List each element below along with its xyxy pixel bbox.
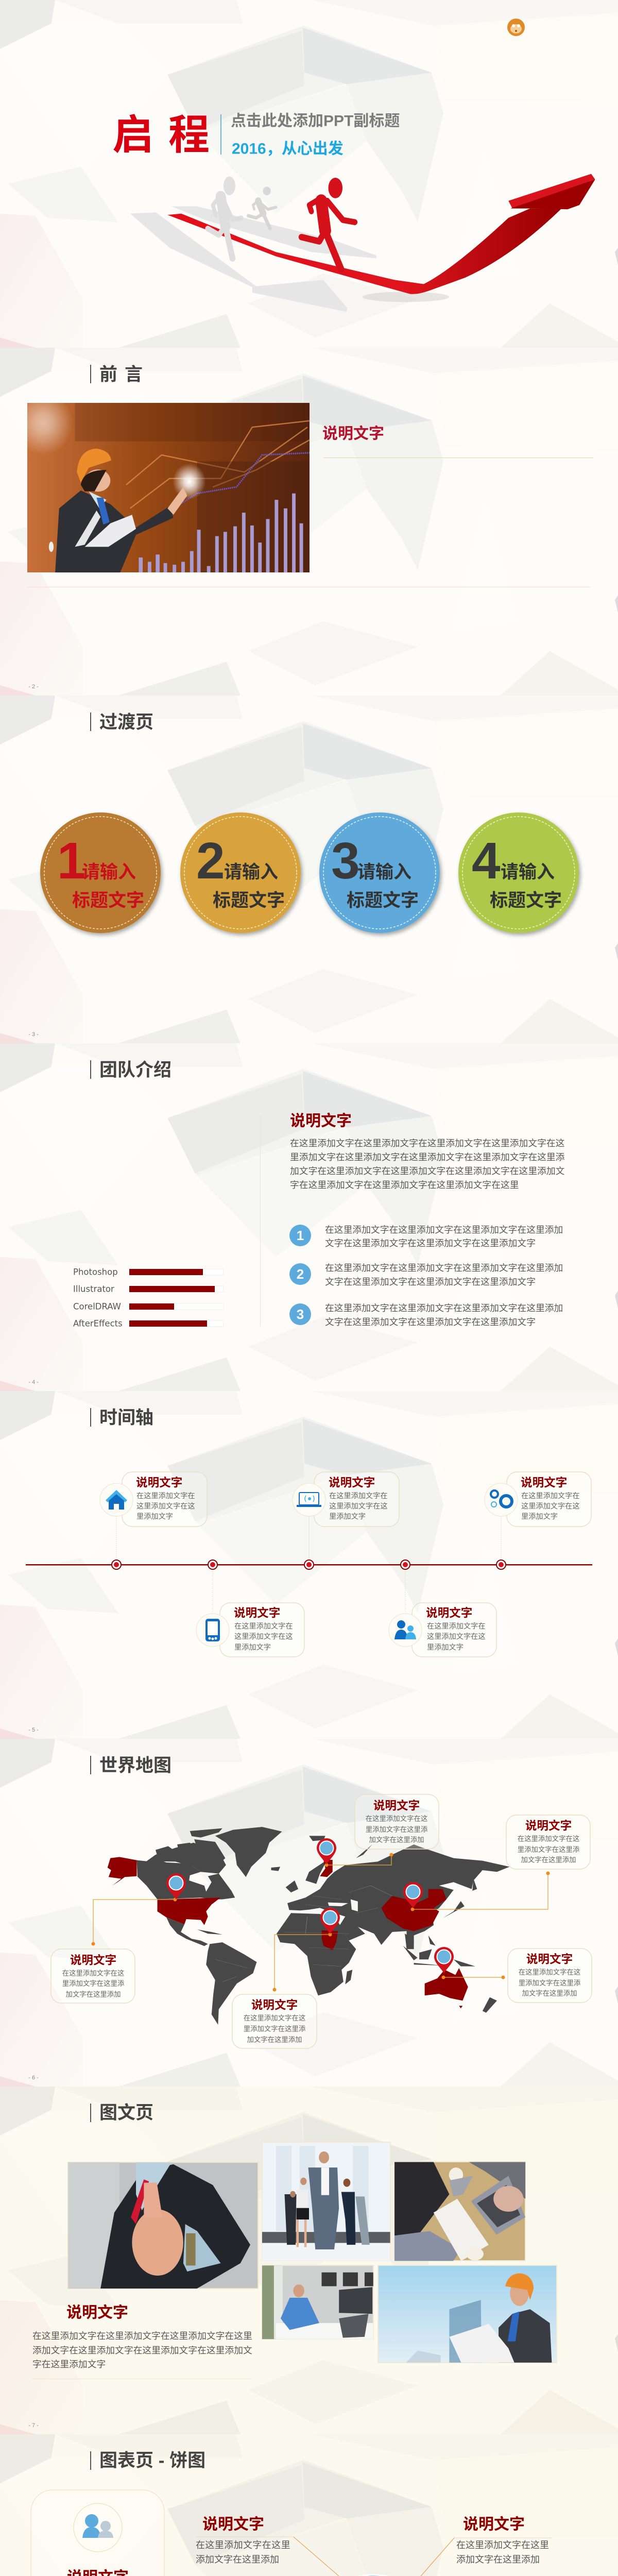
pie label: top left: 说明文字 [202,2516,264,2533]
photo: engineer with blueprint [378,2265,557,2363]
timeline card 2: 这里添加文字在这 [234,1632,293,1641]
illustration: runners on red arrow [130,174,595,312]
map card: south: 说明文字 [251,1999,298,2011]
map card: north [355,1794,439,1849]
skill bars: Illustrator [73,1284,114,1294]
timeline axis [26,1516,592,1614]
vertical divider [260,1115,261,1327]
list item 1: 文字在这里添加文字在这里添加文字在这里添加文字 [325,1238,536,1248]
map card: east: 说明文字 [525,1820,572,1832]
list item 2: 在这里添加文字在这里添加文字在这里添加文字在这里添加 [325,1263,563,1273]
photo: meeting desk [394,2162,525,2261]
map pins [166,1838,454,1973]
timeline card 5: 里添加文字 [521,1513,558,1521]
pie label: top right: 添加文字在这里添加 [456,2554,540,2565]
heading: 图文页: 图文页 [99,2103,153,2123]
icon: phone [196,1614,229,1647]
page number 6: - 6 - [28,2075,39,2081]
skill bars [73,1267,224,1328]
timeline card 5: 这里添加文字在这 [521,1502,580,1511]
map card: north: 加文字在这里添加 [369,1835,424,1843]
map card: southeast: 说明文字 [526,1953,573,1966]
icon: logo badge [507,19,525,36]
map card: southeast: 加文字在这里添加 [522,1989,577,1997]
list item 1 [289,1225,563,1248]
text block: team description: 加文字在这里添加文字在这里添加文字在这里添加文字在这里添加文 [290,1166,565,1176]
heading: 时间轴: 时间轴 [99,1408,153,1428]
text block: team description: 里添加文字在这里添加文字在这里添加文字在这里添加文字在这里添 [290,1152,565,1162]
timeline card 2: 说明文字 [234,1606,280,1620]
timeline card 3: 在这里添加文字在 [329,1492,388,1500]
map card: north: 说明文字 [373,1799,420,1812]
text block: team description: 字在这里添加文字在这里添加文字在这里添加文字在这里 [290,1180,519,1190]
timeline card 1: 这里添加文字在这 [136,1502,195,1511]
heading: 前言: 前言 [99,365,150,384]
felt badge 1 [40,812,161,933]
panel: pie side card [31,2490,164,2576]
photo: engineer with chart [14,391,310,572]
felt badge 2: 2 [196,832,225,890]
icon: people [389,1614,422,1647]
felt badge 1: 标题文字 [72,890,144,911]
photo: thumbs up [68,2162,258,2289]
timeline card 3: 里添加文字 [329,1513,366,1521]
title: 启程 [112,112,225,158]
felt badge 4: 标题文字 [490,890,562,911]
caption block: photo page: 说明文字 [66,2304,128,2321]
page number 3: - 3 - [28,1031,39,1038]
map card: east: 加文字在这里添加 [521,1856,576,1864]
pie label: top right: 说明文字 [463,2516,525,2533]
map card: north: 里添加文字在这里添 [366,1825,427,1833]
pie chart [305,2575,443,2576]
felt badge 4: 4 [472,832,501,890]
skill bars: CorelDRAW [73,1301,121,1312]
map card: southeast [508,1948,592,2003]
page number 7: - 7 - [28,2422,39,2429]
map card: south [232,1994,317,2048]
list item 3 [289,1303,563,1327]
list item 2: 文字在这里添加文字在这里添加文字在这里添加文字 [325,1277,536,1287]
timeline card 1 [122,1472,207,1527]
felt badge 2 [180,812,301,933]
list item 1: 在这里添加文字在这里添加文字在这里添加文字在这里添加 [325,1225,563,1235]
photo: business team [262,2142,390,2261]
skill bars: AfterEffects [73,1319,123,1328]
pie label: top right [399,2516,552,2576]
felt badge 3: 3 [331,832,360,890]
pie label: top left: 在这里添加文字在这里 [196,2540,290,2550]
list item 1: 1 [297,1228,304,1243]
map card: southeast: 里添加文字在这里添 [519,1978,580,1987]
timeline card 3 [314,1472,399,1527]
map card: south: 里添加文字在这里添 [244,2025,305,2033]
caption block: photo page: 字在这里添加文字 [32,2359,106,2369]
timeline card 5: 在这里添加文字在 [521,1492,580,1500]
timeline card 3: 这里添加文字在这 [329,1502,388,1511]
felt badge 2: 请输入 [224,862,278,882]
felt badge 4: 请输入 [501,862,555,882]
timeline card 4 [412,1603,496,1657]
map card: southeast: 在这里添加文字在这 [519,1968,580,1976]
heading: 饼图: 图表页 - 饼图 [99,2450,205,2471]
map card: south: 加文字在这里添加 [247,2035,302,2043]
timeline card 4: 在这里添加文字在 [427,1622,486,1631]
icon: gears [485,1483,518,1516]
list item 3: 3 [297,1307,304,1322]
map card: east [506,1815,590,1869]
timeline card 2: 里添加文字 [234,1643,271,1652]
map card: west: 在这里添加文字在这 [62,1969,124,1977]
timeline card 4: 说明文字 [426,1606,472,1620]
felt badge 4 [458,812,579,933]
text block: team description [290,1113,565,1190]
caption: 说明文字: 说明文字 [322,426,384,442]
timeline card 1: 在这里添加文字在 [136,1492,195,1500]
timeline card 2: 在这里添加文字在 [234,1622,293,1631]
pie label: top right: 在这里添加文字在这里 [456,2540,549,2550]
map card: east: 在这里添加文字在这 [518,1834,579,1842]
text block: team description: 在这里添加文字在这里添加文字在这里添加文字在这里添加文字在这 [290,1138,565,1148]
map card: south: 在这里添加文字在这 [244,2013,305,2022]
felt badge 3: 标题文字 [347,890,419,911]
map connectors [92,1853,550,1992]
text block: team description: 说明文字 [290,1113,352,1129]
felt badge 1: 请输入 [82,862,136,882]
page number 5: - 5 - [28,1727,39,1733]
timeline card 5: 说明文字 [521,1477,567,1489]
tagline: 2016，从心出发 [232,140,344,158]
title divider [220,114,221,155]
map card: east: 里添加文字在这里添 [518,1845,579,1854]
heading: 团队介绍: 团队介绍 [99,1060,171,1080]
caption block: photo page: 添加文字在这里添加文字在这里添加文字在这里添加文 [32,2345,252,2355]
map card: west: 加文字在这里添加 [65,1990,121,1998]
felt badge 1: 1 [57,832,86,890]
pie label: top left: 添加文字在这里添加 [196,2554,279,2565]
timeline card 3: 说明文字 [329,1477,375,1489]
caption block: photo page [32,2304,252,2379]
list item 3: 文字在这里添加文字在这里添加文字在这里添加文字 [325,1317,536,1327]
felt badge 3: 请输入 [357,862,411,882]
subtitle: 点击此处添加PPT副标题 [231,112,400,130]
map card: west [51,1949,135,2003]
timeline card 4: 里添加文字 [427,1643,464,1652]
pie label: top left [196,2516,360,2576]
page number 2: - 2 - [28,684,39,690]
timeline card 5 [507,1472,591,1527]
timeline card 1: 里添加文字 [136,1513,173,1521]
heading: 世界地图: 世界地图 [99,1756,171,1775]
icon: home [100,1483,133,1516]
photo: office worker [262,2265,373,2339]
felt badge 2: 标题文字 [213,890,285,911]
list item 2 [289,1263,563,1287]
timeline card 1: 说明文字 [136,1477,182,1489]
world map [108,1827,509,2025]
map card: west: 说明文字 [70,1954,116,1967]
timeline card 4: 这里添加文字在这 [427,1632,486,1641]
map card: west: 里添加文字在这里添 [62,1979,124,1988]
list item 3: 在这里添加文字在这里添加文字在这里添加文字在这里添加 [325,1303,563,1313]
felt badge 3 [319,812,440,933]
skill bars: Photoshop [73,1267,118,1277]
icon: laptop [293,1483,325,1516]
caption block: photo page: 在这里添加文字在这里添加文字在这里添加文字在这里 [32,2331,252,2341]
list item 2: 2 [297,1266,304,1282]
page number 4: - 4 - [28,1379,39,1385]
heading: 过渡页: 过渡页 [99,712,153,733]
map card: north: 在这里添加文字在这 [366,1815,427,1823]
timeline card 2 [220,1603,304,1657]
